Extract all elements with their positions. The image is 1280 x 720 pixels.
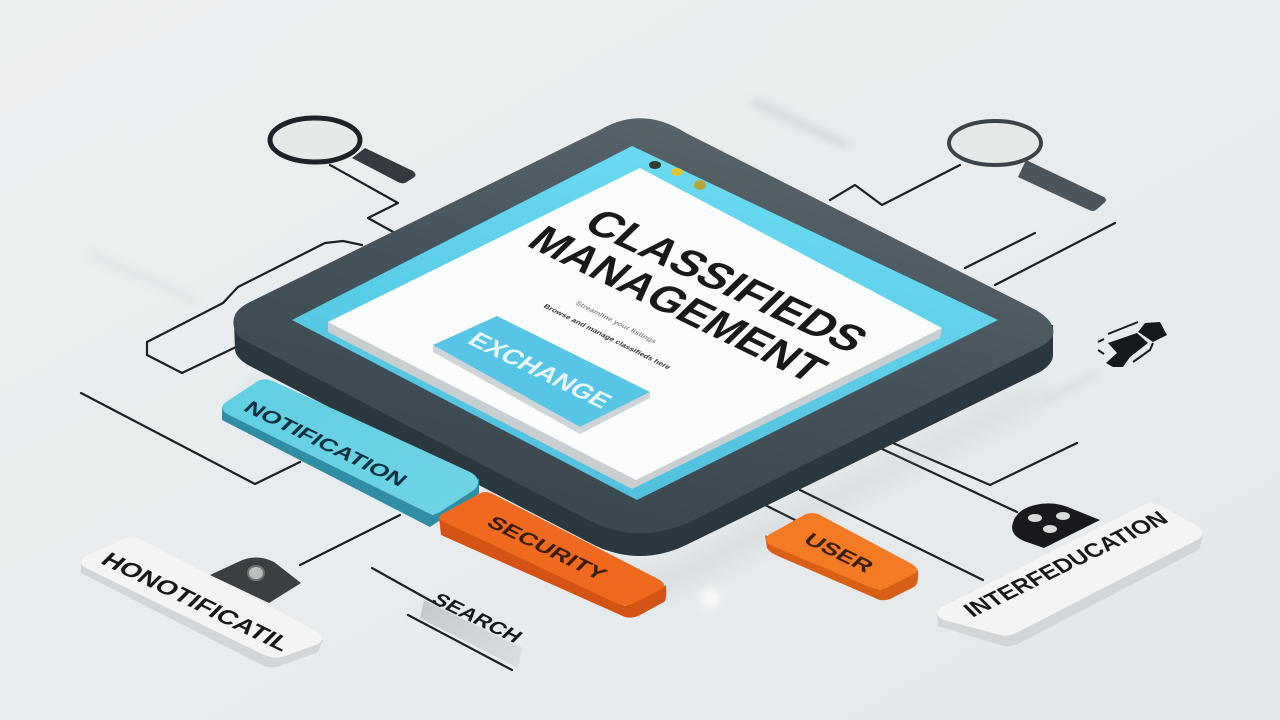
window dots bbox=[649, 161, 706, 190]
main device slab bbox=[233, 118, 1053, 590]
title: CLASSIFIEDS bbox=[574, 201, 878, 361]
slab top surface bbox=[233, 118, 1053, 533]
label: search bbox=[372, 568, 527, 670]
label card: left bbox=[81, 538, 323, 667]
paper sheet bbox=[328, 168, 942, 480]
connector lines: right bbox=[765, 165, 1115, 580]
icon: magnifier top right bbox=[949, 121, 1106, 211]
label: search: SEARCH bbox=[427, 590, 527, 647]
button bbox=[433, 316, 650, 434]
icon: magnifier top left bbox=[270, 118, 416, 183]
icon: right face badge bbox=[1012, 503, 1100, 548]
tab: user bbox=[765, 513, 918, 600]
tab: notification: NOTIFICATION bbox=[239, 398, 412, 490]
tab: security bbox=[439, 492, 666, 618]
soft background smudges bbox=[86, 98, 1098, 404]
label card: left: HONOTIFICATIL bbox=[96, 548, 297, 655]
button: EXCHANGE bbox=[462, 328, 617, 413]
slab side bbox=[234, 322, 1053, 556]
tab: user: USER bbox=[799, 530, 878, 577]
label card: right bbox=[937, 503, 1203, 646]
slab shadow bbox=[240, 385, 1040, 590]
small subtitle text: Streamline your listings bbox=[574, 300, 658, 345]
small subtitle text: Browse and manage classifieds here bbox=[542, 303, 672, 371]
tab: notification bbox=[222, 379, 479, 527]
title: MANAGEMENT bbox=[518, 219, 836, 390]
icon: left shield bbox=[210, 558, 301, 603]
label card: right: INTERFEDUCATION bbox=[958, 506, 1173, 621]
connector lines: left bbox=[81, 165, 400, 565]
decorative glow dot bbox=[700, 588, 720, 608]
paper sheet side bbox=[328, 322, 942, 489]
icon: dark glyph right bbox=[1098, 322, 1167, 367]
tab: security: SECURITY bbox=[482, 513, 611, 584]
cyan screen bbox=[292, 146, 998, 500]
